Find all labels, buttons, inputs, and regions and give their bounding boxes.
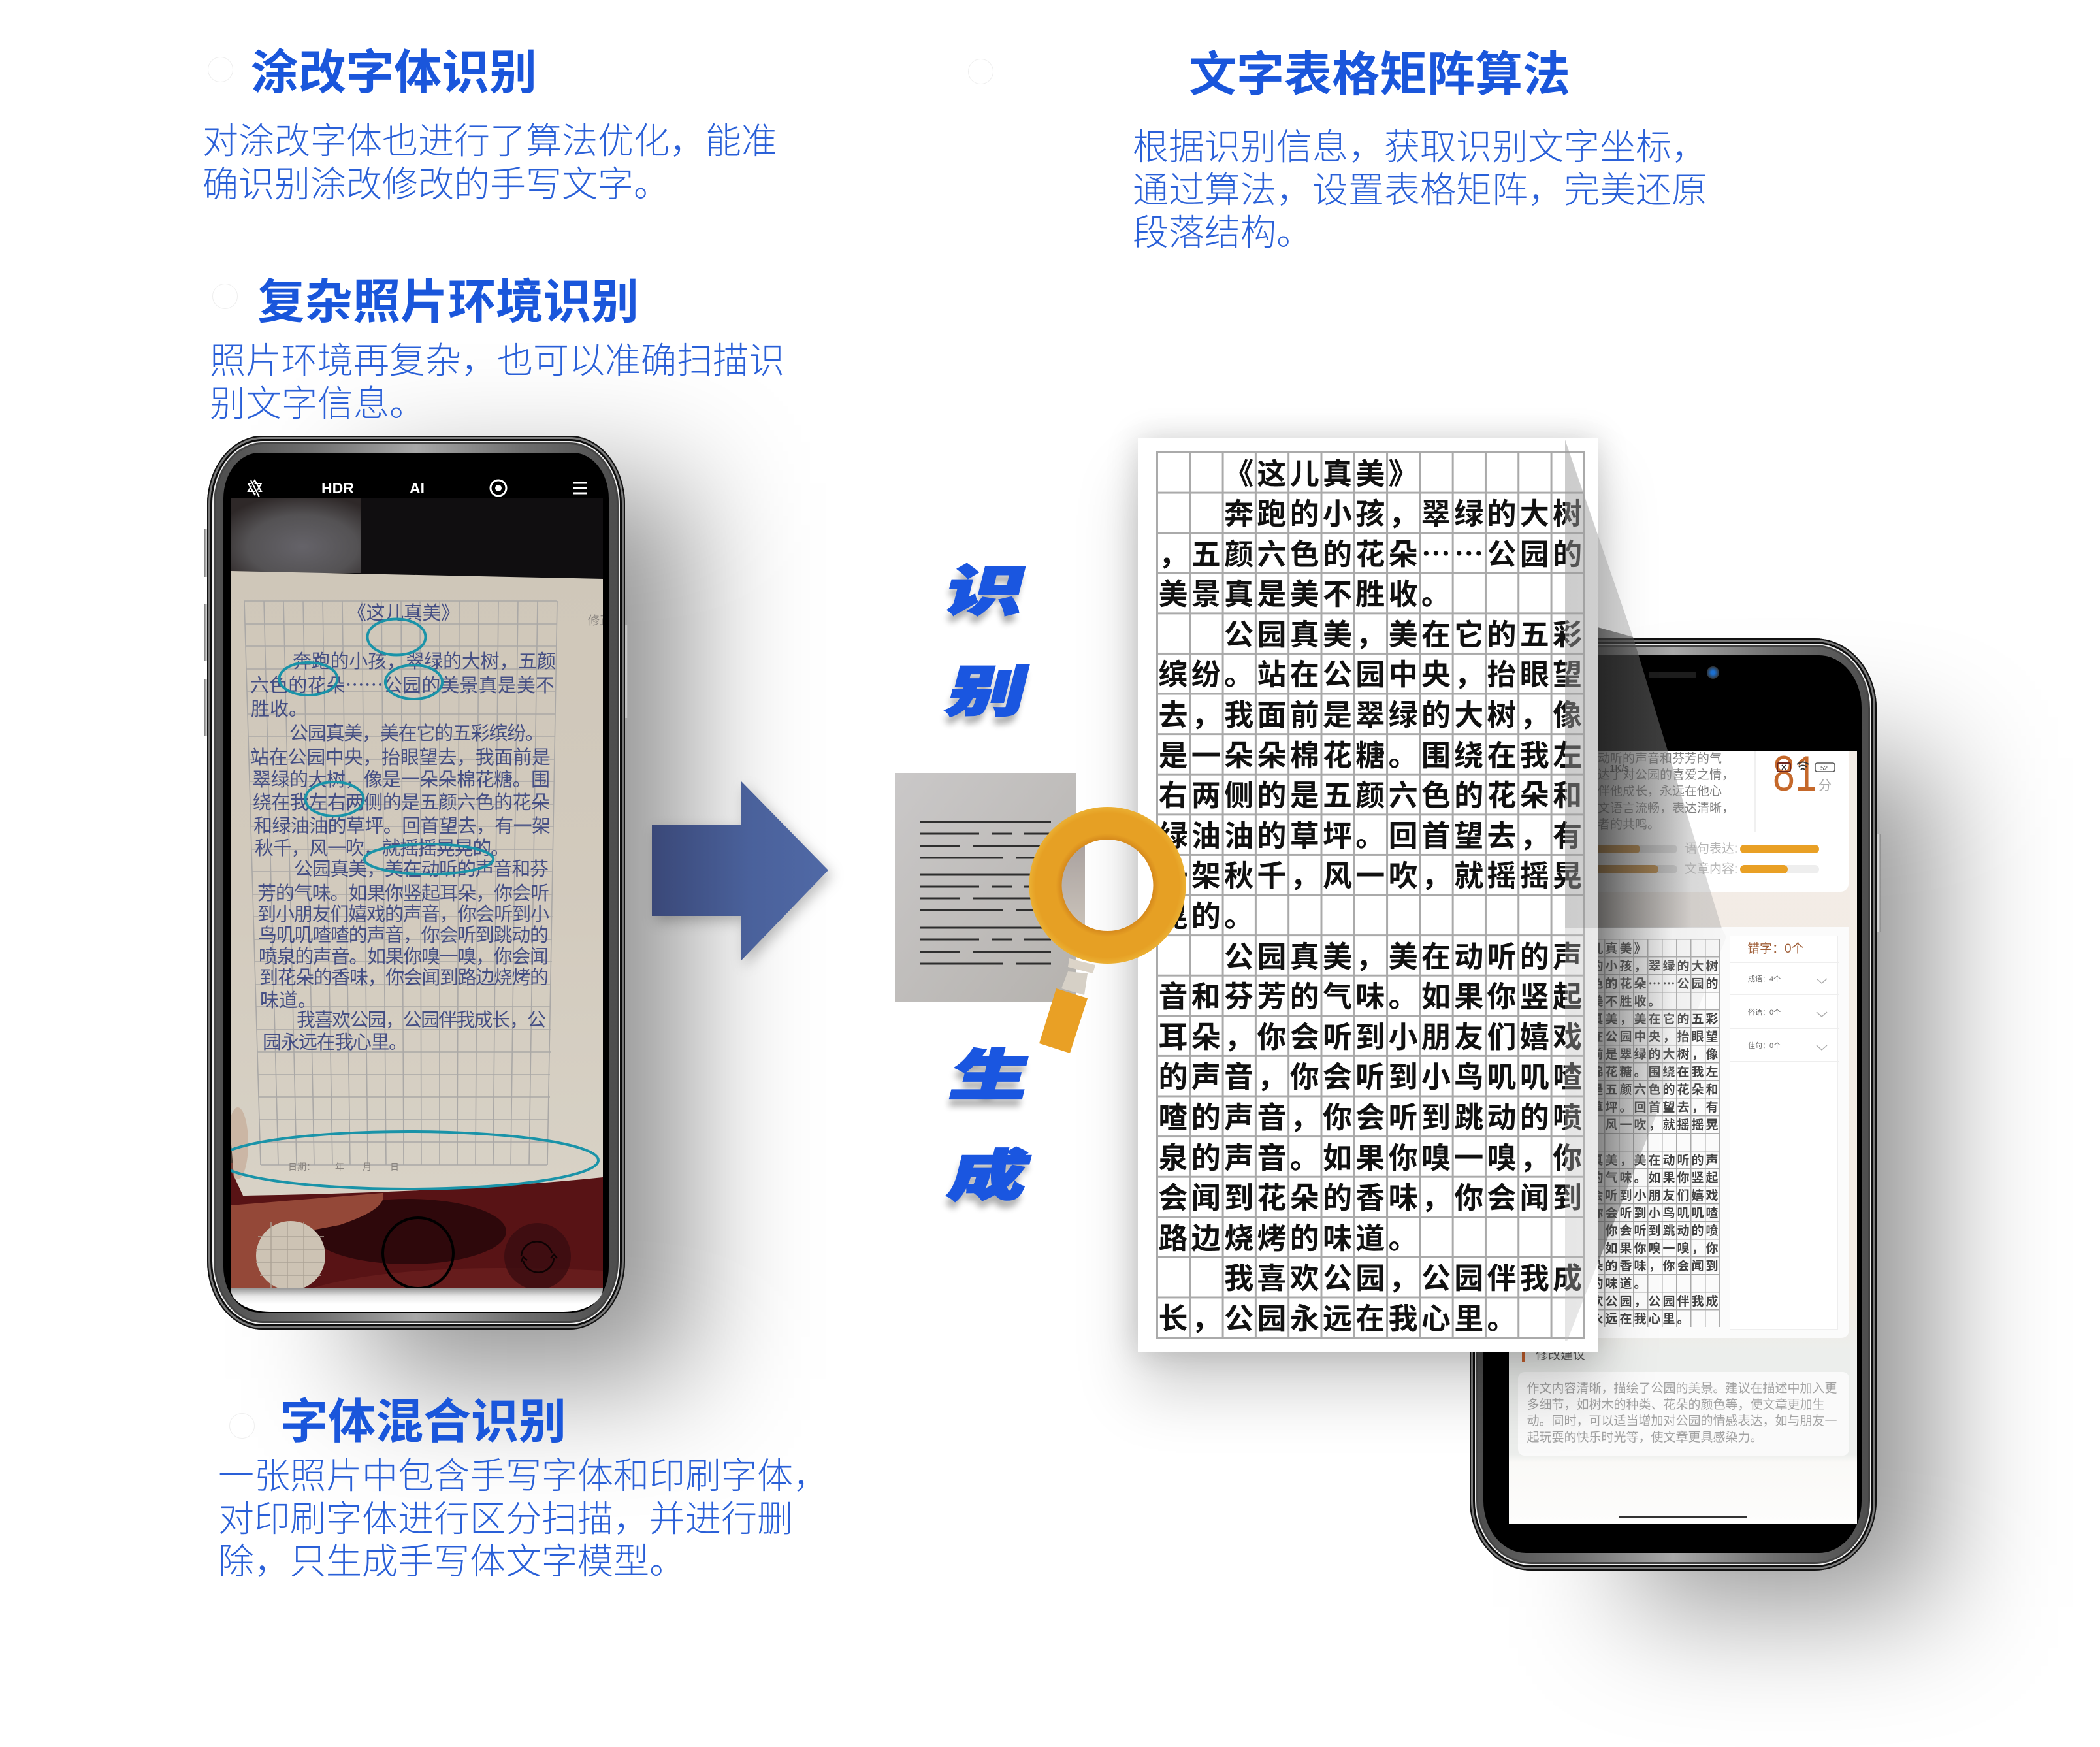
shadow: table card [1138, 438, 1598, 1352]
photo background [231, 498, 603, 1163]
text block: 文字表格矩阵算法 description: 根据识别信息，获取识别文字坐标， 通过算法，设置表格矩阵，完美还原 段落结构。 [1133, 127, 1707, 253]
分 label: 分 [1818, 779, 1832, 793]
essay table card [1509, 927, 1849, 1338]
camera photo of handwritten essay: 年 [335, 1160, 344, 1173]
handwriting: 我喜欢公园，公园伴我成长，公 [297, 1005, 546, 1032]
score card [1509, 751, 1849, 892]
handwriting: 奔跑的小孩，翠绿的大树，五颜 [293, 646, 556, 674]
suggestion box [1518, 1372, 1849, 1456]
table grid [1156, 451, 1585, 1339]
heading: 字体混合识别: 字体混合识别 [280, 1396, 566, 1448]
speaker [1649, 672, 1696, 678]
handwriting: 到小朋友们嬉戏的声音，你会听到小 [257, 899, 549, 926]
status icons: 1K/s [1609, 763, 1629, 774]
camera photo of handwritten essay: 修正 [588, 612, 611, 629]
handwriting: 味道。 [260, 985, 317, 1013]
phone side buttons [204, 529, 628, 736]
phone black bezel [1483, 655, 1862, 1553]
document text lines [920, 822, 1051, 964]
成语 row: 成语：4个 [1748, 975, 1781, 983]
grid lines [244, 601, 557, 1165]
orange marker [1522, 1350, 1525, 1362]
phone frame [207, 436, 625, 1330]
handwriting: 鸟叽叽喳喳的声音，你会听到跳动的 [258, 920, 549, 947]
essay review text: 动听的声音和芬芳的气 达了对公园的喜爱之情， 伴他成长，永远在他心 文语言流畅，表达清晰， 者的共鸣。 [1598, 751, 1734, 832]
vertical label: 识: 识 [939, 547, 1036, 627]
handwriting: 和绿油油的草坪。回首望去，有一架 [253, 811, 551, 838]
left phone [204, 436, 628, 1330]
vertical label: 别: 别 [941, 648, 1038, 727]
front camera [1707, 666, 1719, 679]
handwriting: 公园真美，美在动听的声音和芬 [294, 854, 549, 881]
handwriting: 站在公园中央，抬眼望去，我面前是 [250, 742, 551, 770]
gallery thumbnail [256, 1221, 325, 1290]
mini essay grid [1532, 939, 1720, 1327]
handwriting: 翠绿的大树，像是一朵朵棉花糖。围 [252, 764, 550, 792]
错字 count: 错字：0个 [1747, 942, 1804, 956]
magnifier [1039, 823, 1169, 1053]
progress bars [1598, 842, 1819, 876]
handwriting: 绕在我左右两侧的是五颜六色的花朵 [253, 787, 550, 815]
shadow: left phone [366, 483, 686, 1379]
修改建议 heading: 修改建议 [1536, 1348, 1585, 1362]
document sheet [895, 773, 1085, 1002]
bullet circle 4 [968, 59, 993, 84]
home indicator [1619, 1516, 1747, 1518]
phone screen [1509, 751, 1857, 1524]
chevrons [1816, 979, 1828, 1051]
handwriting: 园永远在我心里。 [263, 1027, 408, 1054]
teal mark ellipses [218, 619, 598, 1189]
text block: 涂改字体识别 description: 对涂改字体也进行了算法优化，能准 确识别涂改修改的手写文字。 [202, 121, 777, 204]
handwriting [250, 598, 556, 1054]
heading: 复杂照片环境识别: 复杂照片环境识别 [257, 276, 639, 329]
top camera toolbar: AI [410, 480, 425, 497]
vertical label: 成: 成 [942, 1132, 1039, 1211]
俗语 row: 俗语：0个 [1748, 1009, 1781, 1017]
camera photo of handwritten essay: 月 [363, 1160, 372, 1173]
phone side button [1875, 834, 1881, 932]
camera photo of handwritten essay: 日期： [288, 1160, 315, 1173]
status icons: 52 [1820, 765, 1828, 772]
top camera toolbar [248, 480, 587, 497]
white bottom strip [231, 1281, 603, 1312]
heading: 涂改字体识别: 涂改字体识别 [251, 46, 537, 99]
handwriting: 到花朵的香味，你会闻到路边烧烤的 [259, 962, 549, 990]
phone black bezel [223, 453, 609, 1313]
switch camera icon [504, 1223, 571, 1290]
bullet circle 1 [208, 57, 233, 82]
handwriting: 公园真美，美在它的五彩缤纷。 [289, 718, 544, 745]
progress bars: 文章内容: [1685, 862, 1737, 876]
handwriting: 胜收。 [251, 694, 308, 721]
handwriting: 六色的花朵……公园的美景真是美不 [250, 670, 555, 698]
camera photo of handwritten essay [231, 479, 603, 1288]
progress bars: 语句表达: [1685, 842, 1737, 856]
divider [1754, 751, 1756, 832]
shadow: right phone [1633, 758, 1933, 1607]
shutter ring [383, 1218, 453, 1288]
heading: 文字表格矩阵算法: 文字表格矩阵算法 [1189, 48, 1570, 101]
佳句 row: 佳句：0个 [1748, 1042, 1781, 1050]
status icons [1609, 762, 1835, 774]
top camera toolbar: HDR [321, 480, 354, 497]
mini essay text: 《这儿真美》 奔跑的小孩，翠绿的大树 ，五颜六色的花朵……公园的 美景真是美不胜收。 公园真美，美在它的五彩 缤纷。站在公园中央，抬眼望 去，我面前是翠绿的大树，像 是一朵朵棉花糖。围绕在我左 右两侧的是五颜六色的花朵和 绿油油的草坪。回首望去，有 一架秋千，风一吹，就摇摇晃 晃的。 公园真美，美在动听的声 音和芬芳的气味。如果你竖起 耳朵，你会听到小朋友们嬉戏 的声音，你会听到小鸟叽叽喳 喳的声音，你会听到跳动的喷 泉的声音。如果你嗅一嗅，你 会闻到花朵的香味，你会闻到 路边烧烤的味道。 我喜欢公园，公园伴我成 长，公园永远在我心里。 [1534, 939, 1720, 1327]
phone frame [1470, 638, 1877, 1571]
panel: generated essay table [1138, 438, 1598, 1352]
handwriting: 秋千，风一吹，就摇摇晃晃的。 [255, 833, 509, 860]
handwriting: 《这儿真美》 [347, 598, 460, 625]
essay text in grid: 《这儿真美》 奔跑的小孩，翠绿的大树 ，五颜六色的花朵……公园的 美景真是美不胜收。 公园真美，美在它的五彩 缤纷。站在公园中央，抬眼望 去，我面前是翠绿的大树，像 是一朵朵棉花糖。围绕在我左 右两侧的是五颜六色的花朵和 绿油油的草坪。回首望去，有 一架秋千，风一吹，就摇摇晃 晃的。 公园真美，美在动听的声 音和芬芳的气味。如果你竖起 耳朵，你会听到小朋友们嬉戏 的声音，你会听到小鸟叽叽喳 喳的声音，你会听到跳动的喷 泉的声音。如果你嗅一嗅，你 会闻到花朵的香味，你会闻到 路边烧烤的味道。 我喜欢公园，公园伴我成 长，公园永远在我心里。 [1159, 449, 1585, 1337]
camera photo of handwritten essay: 日 [390, 1160, 399, 1173]
paper sheet [231, 571, 603, 1196]
bullet circle 2 [212, 284, 238, 309]
suggestion text: 作文内容清晰，描绘了公园的美景。建议在描述中加入更 多细节，如树木的种类、花朵的颜色等，使文章更加生 动。同时，可以适当增加对公园的情感表达，如与朋友一 起玩耍的快乐时光等，使文章更具感染力。 [1527, 1382, 1837, 1445]
text block: 复杂照片环境识别 description: 照片环境再复杂，也可以准确扫描识 别文字信息。 [210, 340, 784, 424]
handwriting: 芳的气味。如果你竖起耳朵，你会听 [257, 878, 549, 906]
text block: 字体混合识别 description: 一张照片中包含手写字体和印刷字体， 对印刷字体进行区分扫描，并进行删 除，只生成手写体文字模型。 [218, 1456, 829, 1582]
bullet circle 3 [229, 1413, 255, 1439]
vertical label: 生: 生 [944, 1032, 1041, 1111]
arrow [650, 781, 835, 967]
error stats panel [1730, 936, 1838, 1330]
handwriting: 喷泉的声音。如果你嗅一嗅，你会闻 [259, 941, 549, 969]
